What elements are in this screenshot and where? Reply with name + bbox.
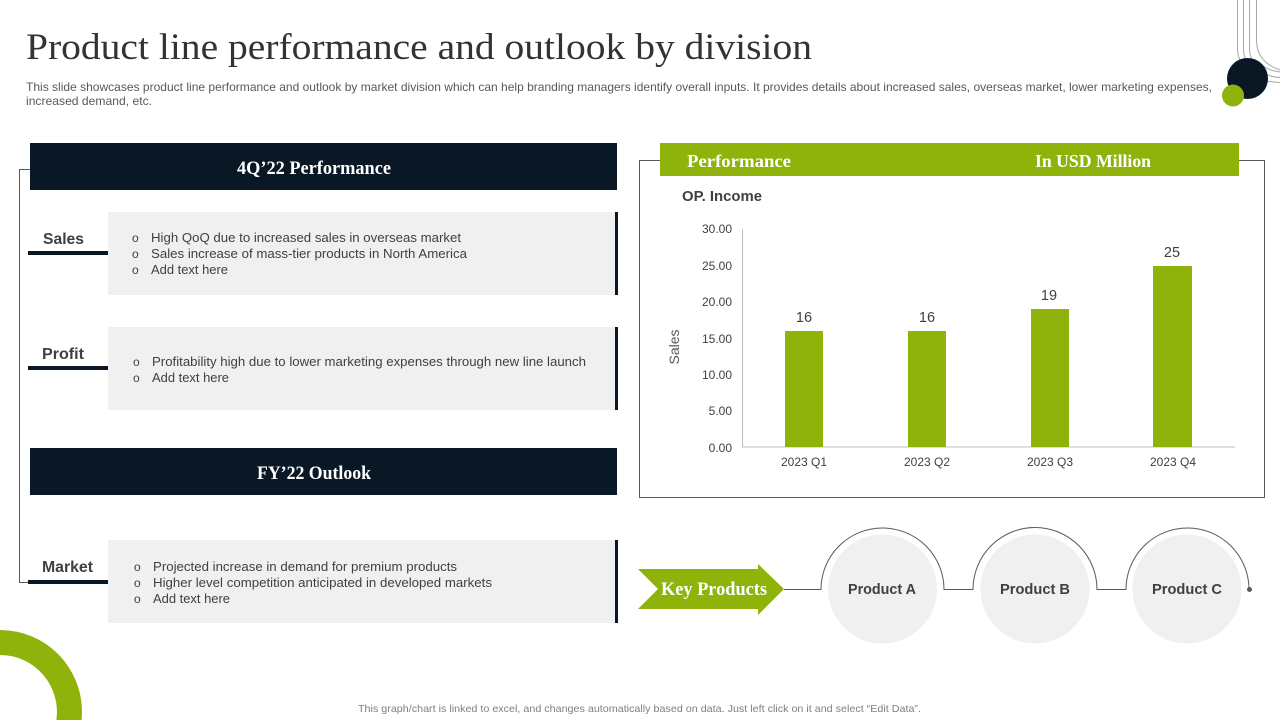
y axis labels: [702, 222, 732, 455]
market bullet list: o: [134, 560, 141, 574]
y axis labels: 15.00: [702, 332, 732, 346]
bar value labels: [796, 245, 1180, 326]
x axis labels: 2023 Q1: [781, 455, 827, 469]
circle: product C: [1132, 534, 1242, 644]
label: profit: [28, 346, 108, 370]
y axis labels: 25.00: [702, 259, 732, 273]
y axis labels: 10.00: [702, 368, 732, 382]
chart header band: In USD Million: [1035, 151, 1151, 171]
label: market: [28, 559, 108, 584]
bar value labels: 25: [1164, 245, 1180, 261]
x axis labels: 2023 Q4: [1150, 455, 1196, 469]
description text: [26, 80, 1212, 108]
market bullet list: Projected increase in demand for premium products: [153, 560, 457, 574]
circle: product A: Product A: [848, 581, 916, 598]
label: profit: Profit: [42, 346, 85, 363]
label: sales: Sales: [43, 231, 84, 248]
arrow: key products: Key Products: [661, 579, 767, 600]
sales bullet list: High QoQ due to increased sales in overseas market: [151, 231, 462, 245]
market bullet list: Higher level competition anticipated in developed markets: [153, 576, 492, 590]
connector: arcs linking products: [784, 528, 1252, 592]
decoration: top right lines and circles: [1222, 0, 1280, 106]
panel: performance chart frame: [640, 160, 1264, 498]
market bullet list: Add text here: [153, 592, 230, 606]
sales bullet list: o: [132, 231, 139, 245]
heading: 4Q'22 Performance: [30, 143, 617, 190]
x axis labels: 2023 Q2: [904, 455, 950, 469]
sales bullet list: [132, 231, 467, 277]
sales bullet list: o: [132, 247, 139, 261]
chart title: OP. Income: [682, 189, 762, 205]
heading: 4Q'22 Performance: 4Q’22 Performance: [237, 158, 391, 179]
description text: This slide showcases product line performance and outlook by market division which can help branding managers identify overall inputs. It provides details about increased sales, overseas market, lower marketing expenses,: [26, 80, 1212, 94]
market bullet list: [134, 560, 492, 606]
sales bullet list: o: [132, 263, 139, 277]
y axis labels: 5.00: [709, 404, 732, 418]
description text: increased demand, etc.: [26, 94, 152, 108]
market bullet list: o: [134, 592, 141, 606]
bar value labels: 19: [1041, 288, 1057, 304]
heading: FY'22 Outlook: FY’22 Outlook: [257, 463, 371, 484]
x axis labels: [781, 455, 1196, 469]
label: market: Market: [42, 559, 94, 576]
left bracket connector: [20, 170, 30, 582]
label: sales: [28, 231, 108, 255]
x axis labels: 2023 Q3: [1027, 455, 1073, 469]
bars: [785, 266, 1192, 447]
title: Product line performance and outlook by division: [26, 27, 812, 68]
footnote: This graph/chart is linked to excel, and changes automatically based on data. Just left click on it and select “Edit Data”.: [358, 703, 921, 715]
arrow: key products: [638, 564, 784, 615]
bar value labels: 16: [919, 310, 935, 326]
circle: product C: Product C: [1152, 581, 1222, 598]
bar value labels: 16: [796, 310, 812, 326]
y axis title: Sales: [666, 329, 682, 365]
panel: market: [28, 540, 618, 623]
chart header band: Performance: [687, 151, 791, 171]
circle: product B: Product B: [1000, 581, 1070, 598]
panel: sales: [28, 212, 618, 295]
decoration: bottom left ring: [0, 630, 82, 720]
profit bullet list: [133, 355, 586, 385]
market bullet list: o: [134, 576, 141, 590]
heading: FY'22 Outlook: [30, 448, 617, 495]
sales bullet list: Add text here: [151, 263, 228, 277]
y axis labels: 0.00: [709, 441, 732, 455]
profit bullet list: o: [133, 355, 140, 369]
profit bullet list: Add text here: [152, 371, 229, 385]
sales bullet list: Sales increase of mass-tier products in North America: [151, 247, 467, 261]
circle: product A: [828, 534, 937, 644]
chart header band: [660, 143, 1239, 176]
bar chart: OP. Income: [666, 222, 1235, 469]
panel: profit: [28, 327, 618, 410]
y axis labels: 20.00: [702, 295, 732, 309]
profit bullet list: Profitability high due to lower marketing expenses through new line launch: [152, 355, 586, 369]
y axis labels: 30.00: [702, 222, 732, 236]
circle: product B: [980, 534, 1090, 644]
profit bullet list: o: [133, 371, 140, 385]
